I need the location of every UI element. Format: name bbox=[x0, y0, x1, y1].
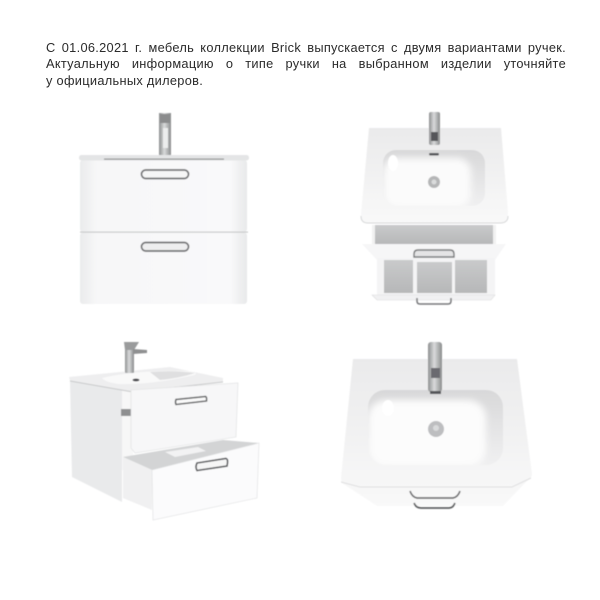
product view: top, drawers closed bbox=[341, 342, 532, 508]
upper drawer front bbox=[131, 383, 238, 453]
lower open drawer bbox=[372, 258, 495, 304]
drain large bbox=[428, 421, 444, 437]
product view: perspective, drawers open bbox=[69, 342, 259, 520]
sink top large bbox=[341, 359, 532, 506]
cabinet opening bbox=[121, 390, 133, 470]
closed drawer handles bbox=[410, 491, 460, 508]
product view: front, drawers closed bbox=[79, 113, 249, 304]
icon: faucet front bbox=[159, 113, 171, 156]
text block: handle notice: у официальных дилеров. bbox=[46, 73, 203, 88]
icon: faucet perspective bbox=[124, 342, 147, 373]
drawer handle upper bbox=[142, 170, 188, 178]
cabinet side bbox=[70, 380, 122, 502]
drain bbox=[428, 176, 440, 188]
basin bbox=[384, 150, 485, 200]
icon: faucet top bbox=[429, 112, 440, 145]
text block: handle notice bbox=[46, 40, 566, 88]
text block: handle notice: С 01.06.2021 г. мебель коллекции Brick выпускается с двумя вариантами ручек. bbox=[46, 40, 566, 54]
lower drawer bbox=[123, 440, 259, 520]
sink top perspective bbox=[69, 367, 223, 392]
cabinet body bbox=[79, 155, 249, 304]
product view: top, drawers open bbox=[361, 112, 508, 304]
drawer handle lower bbox=[142, 242, 188, 251]
text block: handle notice: Актуальную информацию о типе ручки на выбранном изделии уточняйте bbox=[46, 56, 566, 71]
sink top bbox=[361, 128, 508, 223]
icon: faucet top large bbox=[428, 342, 442, 394]
basin large bbox=[368, 390, 503, 454]
upper open drawer bbox=[362, 225, 506, 260]
